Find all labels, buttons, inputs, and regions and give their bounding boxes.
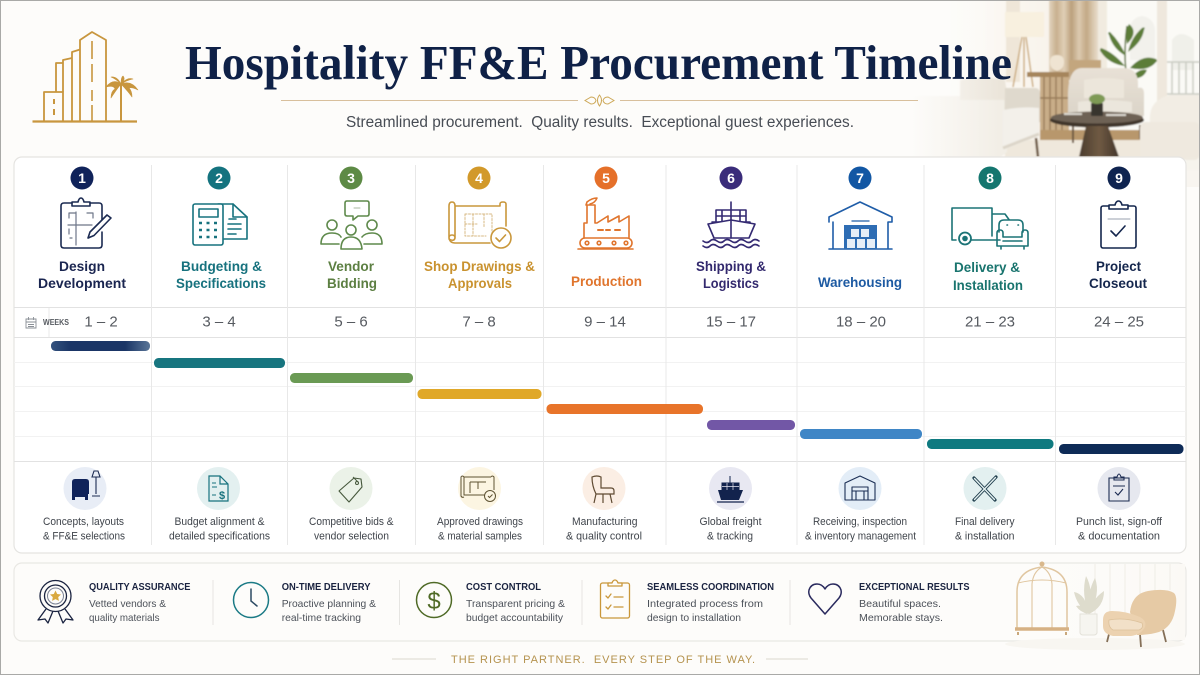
detail icon: armchair and lamp (64, 467, 106, 510)
text (89, 581, 190, 624)
description: Approved drawings (437, 516, 523, 528)
description (805, 516, 916, 542)
detail icon: price tag (330, 467, 372, 510)
right sofa (1140, 95, 1200, 157)
badge 6: 6 (727, 170, 735, 186)
description: Concepts, layouts (43, 516, 124, 528)
weeks value: 21 – 23 (965, 314, 1015, 330)
icon: checklist (600, 580, 630, 618)
step 8: delivery and installation (927, 166, 1054, 542)
text (647, 581, 774, 624)
label (176, 258, 266, 291)
step 3: vendor bidding (290, 166, 413, 542)
label (38, 258, 126, 291)
description (437, 516, 523, 542)
benefit: cost control (416, 581, 565, 624)
logo: hotel tower and palm (32, 32, 138, 122)
description: vendor selection (314, 530, 389, 542)
armchair (1103, 590, 1176, 647)
wall (940, 0, 1110, 170)
label: Production (571, 273, 642, 289)
description (1076, 516, 1163, 542)
badge 1 (70, 166, 94, 190)
icon: calculator and document (193, 204, 247, 245)
icon: cargo ship (703, 202, 759, 248)
detail icon: wrench and screwdriver (964, 467, 1006, 510)
label (953, 259, 1023, 293)
description: detailed specifications (169, 530, 270, 542)
side table and small lamp (1027, 72, 1069, 77)
lamp column (1006, 0, 1020, 82)
gantt bar (927, 439, 1054, 449)
icon: warehouse with boxes (829, 202, 892, 249)
step 5: production (546, 166, 703, 542)
badge 4: 4 (475, 170, 483, 186)
label: Specifications (176, 275, 266, 291)
benefit: exceptional results (809, 581, 970, 624)
benefit: seamless coordination (600, 580, 774, 624)
window (1105, 0, 1200, 170)
description (169, 516, 270, 542)
benefit: quality assurance (38, 580, 190, 624)
weeks value: 24 – 25 (1094, 314, 1144, 330)
step 4: shop drawings and approvals (418, 166, 542, 542)
badge 2 (208, 166, 230, 190)
icon: dollar coin: $ (427, 588, 441, 615)
description: Global freight (700, 516, 762, 528)
description: & documentation (1078, 530, 1160, 542)
detail icon: small warehouse (838, 467, 882, 510)
panel: timeline table (14, 157, 1186, 553)
label: Design (59, 258, 105, 274)
weeks value: 7 – 8 (462, 314, 496, 330)
description: & quality control (566, 530, 642, 542)
text: real-time tracking (282, 612, 361, 624)
detail icon: small cargo ship (709, 467, 752, 510)
badge 2: 2 (215, 170, 223, 186)
curtains (1049, 0, 1099, 80)
step 7: warehousing (800, 166, 922, 542)
description: & FF&E selections (43, 530, 125, 542)
description (955, 516, 1015, 542)
text: QUALITY ASSURANCE (89, 581, 190, 593)
icon: factory on conveyor (578, 198, 633, 249)
gantt bar (290, 373, 413, 383)
description: Budget alignment & (174, 516, 265, 528)
bell cart (1015, 562, 1069, 635)
icon: blueprint with check (449, 202, 511, 248)
potted plant (1074, 576, 1104, 635)
icon: award ribbon (38, 580, 73, 623)
gantt bar (546, 404, 703, 414)
badge 4 (468, 166, 490, 190)
label: Project (1096, 258, 1141, 274)
description: Final delivery (955, 516, 1015, 528)
step 9: project closeout (1059, 166, 1184, 542)
label: Budgeting & (181, 258, 262, 274)
step 6: shipping and logistics (696, 166, 795, 542)
icon: checklist clipboard (1101, 201, 1136, 248)
icon: clock (234, 582, 268, 618)
tagline: THE RIGHT PARTNER. EVERY STEP OF THE WAY. (451, 654, 755, 666)
icon: heart (809, 584, 841, 614)
label: Shipping & (696, 258, 766, 274)
weeks value: 18 – 20 (836, 314, 886, 330)
lounge photo illustration (895, 0, 1200, 187)
label: Vendor (328, 258, 375, 274)
detail icon: small clipboard (1098, 467, 1140, 510)
detail icon: chair (582, 467, 626, 510)
text: quality materials (89, 612, 160, 624)
text: ON-TIME DELIVERY (282, 581, 370, 593)
gantt bar (800, 429, 922, 439)
description (43, 516, 125, 542)
weeks value: 5 – 6 (334, 314, 368, 330)
gantt bar (51, 341, 150, 351)
label: Shop Drawings & (424, 258, 535, 274)
text (466, 581, 565, 624)
label: Installation (953, 277, 1023, 293)
floor (1040, 130, 1145, 142)
coffee table (1050, 112, 1144, 128)
label (424, 258, 535, 291)
label (696, 258, 766, 291)
description: Manufacturing (572, 516, 638, 528)
text (859, 581, 970, 624)
badge 9 (1108, 166, 1130, 190)
text (282, 581, 376, 624)
description: & material samples (438, 530, 522, 542)
gantt bar (154, 358, 285, 368)
detail icon: budget document (197, 467, 240, 510)
text: Vetted vendors & (89, 598, 166, 610)
label: Bidding (327, 275, 377, 291)
description: Punch list, sign-off (1076, 516, 1163, 528)
panel: benefits strip (14, 563, 1186, 641)
description (566, 516, 642, 542)
description (700, 516, 762, 542)
icon: dollar coin (416, 582, 452, 618)
label (1089, 258, 1147, 291)
badge 6 (720, 166, 742, 190)
icon: clipboard with plan and pencil (61, 198, 111, 248)
step 1: design development (26, 166, 150, 542)
step 2: budgeting and specifications (154, 166, 285, 542)
subtitle: Streamlined procurement. Quality results. Exceptional guest experiences. (346, 114, 854, 131)
detail icon: approved drawing (458, 467, 501, 510)
text: budget accountability (466, 612, 564, 624)
weeks label: WEEKS (43, 317, 69, 327)
description: & installation (955, 530, 1014, 542)
lobby illustration: bell cart, plant and armchair (985, 562, 1185, 650)
text: Integrated process from (647, 598, 763, 610)
badge 8: 8 (986, 170, 994, 186)
label: Delivery & (954, 259, 1020, 275)
badge 7: 7 (856, 170, 864, 186)
floor lamp (1005, 12, 1044, 37)
description: Competitive bids & (309, 516, 394, 528)
weeks value: 1 – 2 (84, 314, 118, 330)
weeks value: 3 – 4 (202, 314, 236, 330)
back armchair (1068, 68, 1144, 116)
gantt bar (1059, 444, 1184, 454)
text: SEAMLESS COORDINATION (647, 581, 774, 593)
badge 9: 9 (1115, 170, 1123, 186)
badge 7 (848, 166, 872, 190)
benefit: on-time delivery (234, 581, 376, 624)
description: & tracking (707, 530, 753, 542)
text: Proactive planning & (282, 598, 376, 610)
label: Approvals (448, 275, 512, 291)
text: design to installation (647, 612, 741, 624)
text: Beautiful spaces. (859, 598, 941, 610)
description: & inventory management (805, 530, 916, 542)
weeks value: 15 – 17 (706, 314, 756, 330)
badge 3 (340, 166, 362, 190)
label: Development (38, 275, 126, 291)
title: Hospitality FF&E Procurement Timeline (185, 35, 1012, 90)
badge 1: 1 (78, 170, 86, 186)
badge 3: 3 (347, 170, 355, 186)
text: EXCEPTIONAL RESULTS (859, 581, 970, 593)
icon: truck and armchair (952, 208, 1028, 249)
text: Transparent pricing & (466, 598, 565, 610)
badge 5 (594, 166, 618, 190)
gantt bar (418, 389, 542, 399)
description: Receiving, inspection (813, 516, 907, 528)
badge 5: 5 (602, 170, 610, 186)
badge 8 (978, 166, 1002, 190)
detail icon: budget document: $ (219, 490, 225, 502)
text: COST CONTROL (466, 581, 542, 593)
label (327, 258, 377, 291)
text: Memorable stays. (859, 612, 943, 624)
title divider ornament (281, 95, 918, 106)
front armchair (900, 96, 1007, 160)
label: Logistics (703, 275, 759, 291)
label: Closeout (1089, 275, 1147, 291)
weeks label (26, 317, 69, 328)
potted palm (1125, 26, 1127, 78)
icon: people and speech bubble (321, 201, 382, 249)
description (309, 516, 394, 542)
label: Warehousing (818, 274, 902, 290)
weeks value: 9 – 14 (584, 314, 626, 330)
gantt bar (707, 420, 795, 430)
